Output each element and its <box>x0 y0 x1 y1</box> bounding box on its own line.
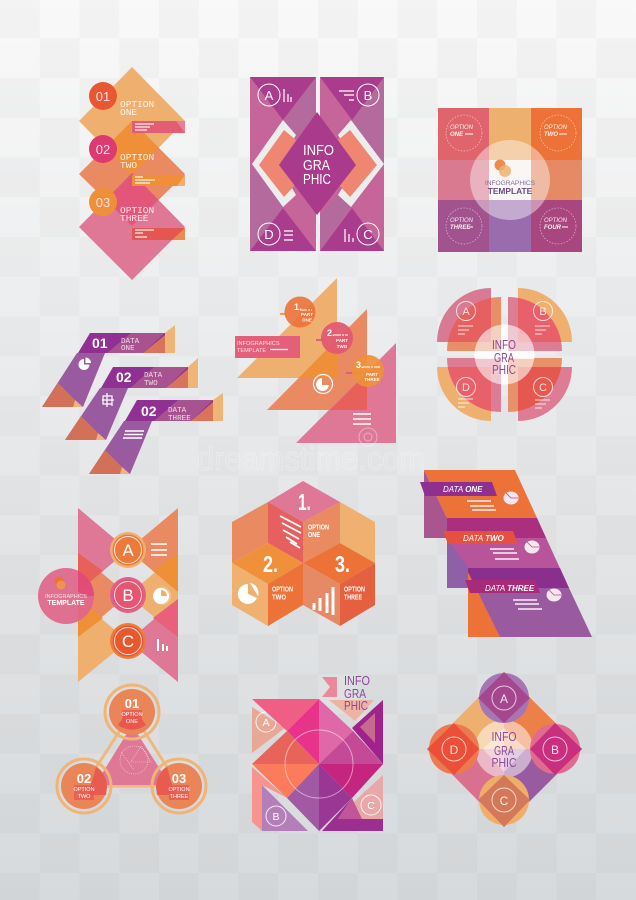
option labels <box>120 99 154 224</box>
ribbon data one: ONE <box>121 345 135 353</box>
quadrant C <box>508 358 572 421</box>
badge A <box>110 532 146 568</box>
ribbon one <box>132 121 185 133</box>
quadrant A: A <box>462 306 470 318</box>
marker D <box>258 223 293 245</box>
icon: bars <box>158 639 167 651</box>
right chevron <box>338 120 384 207</box>
labels B C D <box>456 302 552 408</box>
node C: C <box>500 794 509 808</box>
option labels: OPTION <box>272 586 293 594</box>
template circle: INFOGRAPHICS <box>45 594 87 600</box>
marker B: B <box>364 88 372 103</box>
corner C and chevron: C <box>367 800 375 812</box>
ribbon two <box>132 175 185 186</box>
title <box>344 673 370 713</box>
panel: four options square template <box>438 108 582 252</box>
option one: OPTION <box>450 125 474 131</box>
panel: info graphic mirrored rectangles <box>250 77 384 251</box>
marker A: A <box>265 88 274 103</box>
icon: lines <box>151 544 167 555</box>
panel: triangles parts <box>235 278 396 443</box>
circle 02: TWO <box>78 794 91 800</box>
corner A: A <box>262 717 270 729</box>
label data one <box>420 482 497 496</box>
center circle with title: GRA <box>494 350 514 365</box>
part three: THREE <box>364 377 380 382</box>
option labels: THREE <box>344 594 362 602</box>
circle 02 <box>57 759 111 813</box>
panel: bowties ABC <box>38 508 178 682</box>
title: PHIC <box>492 755 516 770</box>
node D <box>427 723 479 775</box>
labels B C D: D <box>462 382 470 394</box>
numbers <box>263 489 350 577</box>
option one: ONE <box>450 132 464 138</box>
option labels: TWO <box>272 594 286 602</box>
badge C <box>110 623 146 659</box>
option labels: THREE <box>120 213 149 224</box>
numbers: 2. <box>263 551 278 577</box>
numbers: 3. <box>335 551 350 577</box>
part two <box>316 322 353 354</box>
node C <box>478 775 530 827</box>
title: INFO <box>344 673 370 688</box>
node A <box>478 672 530 723</box>
option three: OPTION <box>450 218 474 224</box>
badge 02 <box>89 135 117 163</box>
icon: lines <box>353 414 371 424</box>
watermark: dreamstime.com <box>197 440 425 477</box>
corner C and chevron <box>322 775 383 831</box>
center circle: INFOGRAPHICS <box>485 180 536 187</box>
quadrant D <box>437 358 501 421</box>
option labels: ONE <box>308 532 320 539</box>
center diamond with title <box>279 112 356 215</box>
center circle with title <box>474 324 535 385</box>
center circle: TEMPLATE <box>488 186 533 196</box>
panel: data ribbons <box>42 325 223 474</box>
option two: TWO <box>544 132 558 138</box>
template label <box>235 336 300 358</box>
quadrant B <box>508 288 572 351</box>
center diamond with title: GRA <box>303 157 330 174</box>
option labels <box>272 524 365 602</box>
title: PHIC <box>344 698 368 713</box>
badge B: B <box>122 586 134 605</box>
icon: slanted lines <box>280 516 301 548</box>
option four <box>540 208 576 244</box>
badge 01 <box>89 82 117 110</box>
icon: bars <box>314 587 333 615</box>
circle 03: OPTION <box>168 787 190 793</box>
title: INFO <box>492 729 516 744</box>
panel: hex cubes <box>232 481 375 626</box>
center diamond with title: INFO <box>303 142 334 159</box>
circle 02: OPTION <box>73 787 95 793</box>
template label: INFOGRAPHICS <box>237 341 280 347</box>
label data two: DATA TWO <box>463 534 505 543</box>
ribbon data one <box>42 325 175 407</box>
option labels: OPTION <box>344 586 365 594</box>
label data one: DATA ONE <box>443 485 483 494</box>
circle 01: ONE <box>126 719 138 725</box>
badge 03: 03 <box>96 195 110 210</box>
option one <box>446 115 482 151</box>
marker A <box>258 84 291 106</box>
labels B C D: B <box>539 306 547 318</box>
part three: PART <box>366 372 378 377</box>
template circle: TEMPLATE <box>47 600 85 607</box>
left chevron <box>252 120 296 207</box>
marker B <box>339 84 379 106</box>
center circle <box>470 140 550 220</box>
pies and lines <box>467 492 562 609</box>
ribbon data two: DATA <box>144 372 163 380</box>
option labels: OPTION <box>120 152 154 163</box>
part two: TWO <box>337 344 348 349</box>
part one: ONE <box>302 318 312 322</box>
circle 03: 03 <box>172 771 186 786</box>
part three: 3. <box>356 360 364 370</box>
ribbon data one: 01 <box>92 335 108 351</box>
ribbon data one: DATA <box>121 338 140 346</box>
part three <box>346 355 384 387</box>
ribbon data two: TWO <box>144 380 158 388</box>
part two: PART <box>336 338 348 343</box>
center circle with title: INFO <box>492 337 516 352</box>
ribbon three <box>132 228 185 240</box>
option labels: TWO <box>120 160 137 171</box>
center dotted icon <box>120 746 151 774</box>
dark chevron right <box>352 700 383 764</box>
option four: FOUR <box>544 225 562 231</box>
icon: pie <box>153 587 171 605</box>
title: GRA <box>494 743 514 758</box>
label data two <box>443 531 518 544</box>
template circle <box>38 568 94 624</box>
node A: A <box>500 692 508 706</box>
ribbon data three: DATA <box>168 407 187 415</box>
part two: 2. <box>327 328 335 338</box>
node D: D <box>450 743 459 757</box>
panel: three circles triangle <box>57 685 206 813</box>
badge B <box>110 577 146 613</box>
label data three <box>465 580 540 593</box>
panel: slanted data sheets <box>420 470 592 637</box>
circle 01: OPTION <box>121 712 143 718</box>
circle 02: 02 <box>77 771 91 786</box>
ribbon data three <box>89 393 223 474</box>
circle 03: THREE <box>170 794 189 800</box>
corner B: B <box>272 811 280 823</box>
badge A: A <box>122 541 134 560</box>
icon: pie <box>314 374 332 394</box>
flag <box>322 677 337 697</box>
center diamond with title: PHIC <box>303 171 331 188</box>
marker D: D <box>264 227 274 242</box>
circle 03 <box>152 759 206 813</box>
node B: B <box>551 743 559 757</box>
panel: stacked diamonds options <box>79 67 185 280</box>
numbers: 1. <box>298 489 311 515</box>
panel: diamond with four circles <box>427 672 582 827</box>
badge C: C <box>122 632 134 651</box>
part one: 1. <box>294 302 302 312</box>
ribbon data two: 02 <box>116 369 132 385</box>
ribbon data two <box>65 358 198 440</box>
option two: OPTION <box>544 125 568 131</box>
circle 01 <box>105 685 159 739</box>
option two <box>540 115 576 151</box>
ribbon data three: 02 <box>141 403 157 419</box>
template label: TEMPLATE <box>237 348 266 354</box>
label data three: DATA THREE <box>485 584 535 593</box>
option three: THREE <box>450 225 471 231</box>
title: GRA <box>344 686 366 701</box>
badge 03 <box>89 188 117 216</box>
option labels: OPTION <box>120 205 154 216</box>
corner B <box>262 785 308 831</box>
panel: tangram <box>252 673 383 831</box>
icon: pie <box>238 583 258 604</box>
option four: OPTION <box>544 218 568 224</box>
ribbon data three: THREE <box>168 415 191 423</box>
badge 01: 01 <box>96 89 110 104</box>
part one <box>280 296 316 328</box>
center circle <box>475 720 533 778</box>
marker C: C <box>363 227 373 242</box>
node B <box>530 723 582 775</box>
option labels: OPTION <box>308 524 329 532</box>
part one: PART <box>301 312 313 317</box>
corner A <box>252 707 285 753</box>
panel: circular quadrants <box>437 288 572 421</box>
circle 01: 01 <box>125 696 139 711</box>
option three <box>446 208 482 244</box>
badge 02: 02 <box>96 142 110 157</box>
option labels: ONE <box>120 107 137 118</box>
option labels: OPTION <box>120 99 154 110</box>
title <box>492 729 516 770</box>
marker C <box>345 223 379 245</box>
center circle with title: PHIC <box>492 362 516 377</box>
labels B C D: C <box>539 382 547 394</box>
